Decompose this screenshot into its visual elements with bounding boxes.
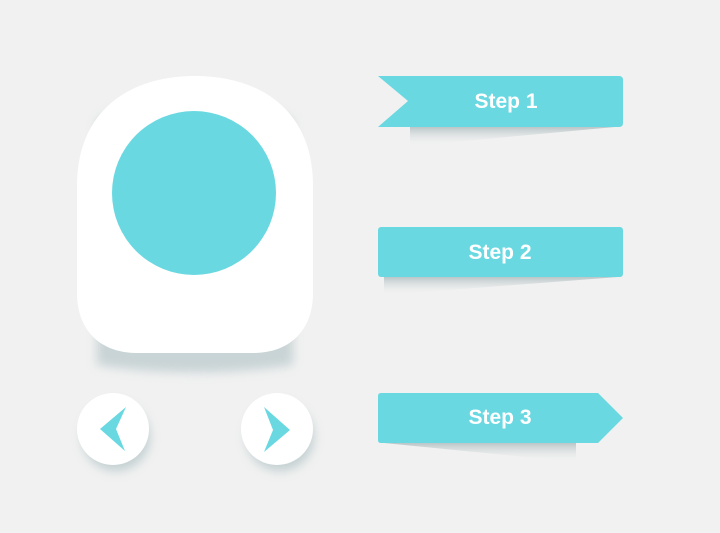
button: next (241, 393, 314, 471)
banner: step 3 (378, 393, 623, 462)
banner: step 2 (378, 227, 623, 295)
icon: right arrow (264, 407, 290, 452)
banner: step 1 (378, 76, 623, 146)
screen circle (112, 111, 276, 275)
banner: step 2: Step 2 (468, 241, 532, 264)
banner: step 3: Step 3 (468, 406, 532, 429)
icon: left arrow (100, 407, 126, 451)
button: previous (77, 393, 150, 471)
device panel (77, 76, 313, 372)
banner: step 1: Step 1 (474, 90, 538, 113)
